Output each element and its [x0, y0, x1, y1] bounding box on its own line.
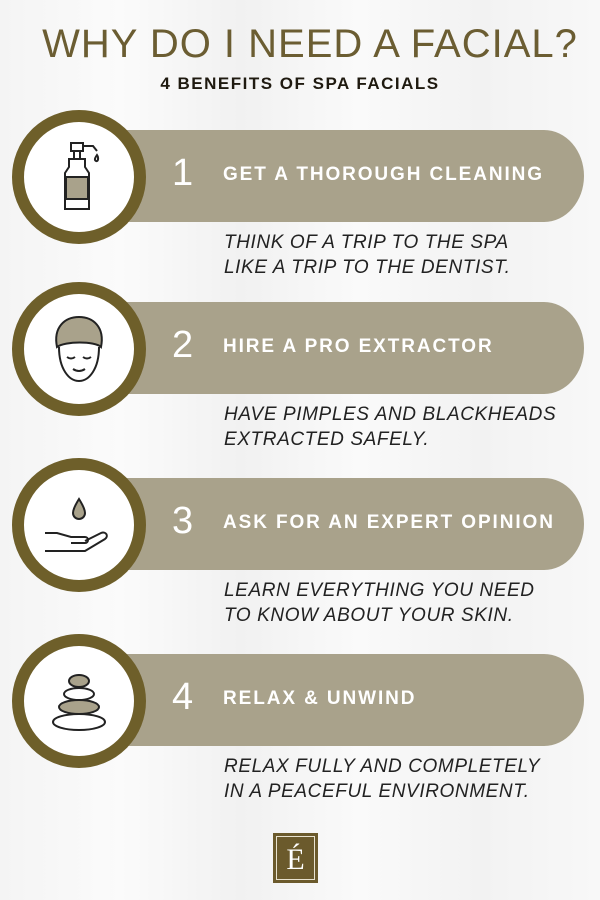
- description 4: IN A PEACEFUL ENVIRONMENT.: [224, 781, 530, 802]
- description 2: HAVE PIMPLES AND BLACKHEADS: [224, 404, 556, 425]
- description 1: THINK OF A TRIP TO THE SPA: [224, 232, 509, 253]
- description 3: LEARN EVERYTHING YOU NEED: [224, 580, 535, 601]
- banner 2: [110, 302, 584, 394]
- description 2: [224, 404, 556, 450]
- banner 4: RELAX & UNWIND: [223, 688, 416, 709]
- description 3: TO KNOW ABOUT YOUR SKIN.: [224, 605, 514, 626]
- description 4: [224, 756, 541, 802]
- banner 3: 3: [172, 500, 193, 542]
- title: WHY DO I NEED A FACIAL?: [42, 22, 578, 66]
- description 1: LIKE A TRIP TO THE DENTIST.: [224, 257, 510, 278]
- banner 2: HIRE A PRO EXTRACTOR: [223, 336, 494, 357]
- icon circle 2: face with towel: [12, 282, 146, 416]
- banner 4: [110, 654, 584, 746]
- banner 3: ASK FOR AN EXPERT OPINION: [223, 512, 555, 533]
- description 2: EXTRACTED SAFELY.: [224, 429, 429, 450]
- logo: [273, 833, 318, 883]
- banner 2: 2: [172, 324, 193, 366]
- icon circle 1: soap pump: [12, 110, 146, 244]
- logo: É: [286, 843, 305, 876]
- description 3: [224, 580, 535, 626]
- description 4: RELAX FULLY AND COMPLETELY: [224, 756, 540, 777]
- banner 3: [110, 478, 584, 570]
- banner 1: [110, 130, 584, 222]
- banner 1: 1: [172, 152, 193, 194]
- icon circle 4: stones: [12, 634, 146, 768]
- banner 4: 4: [172, 676, 193, 718]
- description 1: [224, 232, 510, 278]
- banner 1: GET A THOROUGH CLEANING: [223, 164, 544, 185]
- subtitle: 4 BENEFITS OF SPA FACIALS: [160, 74, 440, 93]
- icon circle 3: hand with drop: [12, 458, 146, 592]
